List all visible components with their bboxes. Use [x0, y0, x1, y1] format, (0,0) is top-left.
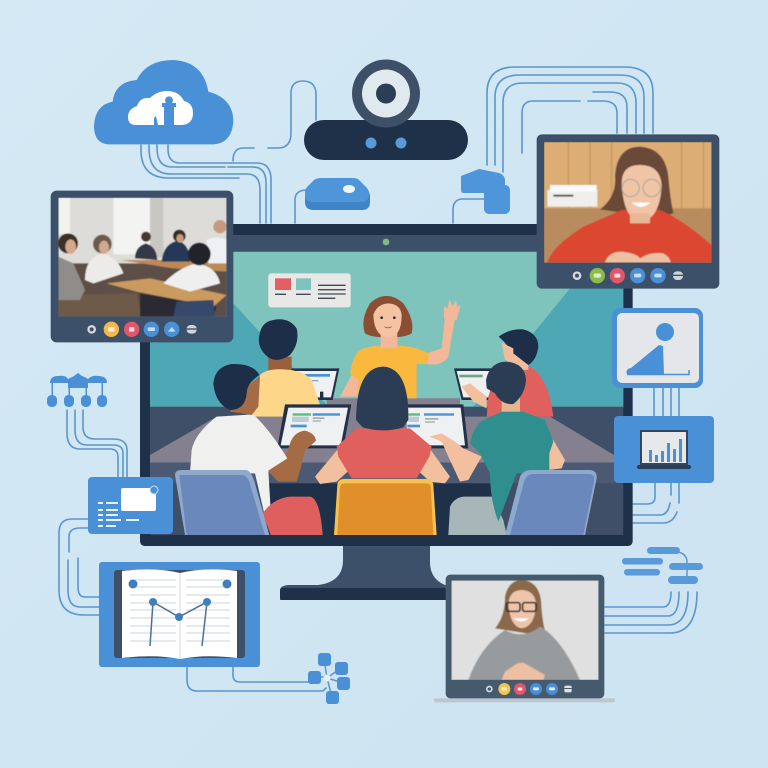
laptop: back right [454, 368, 493, 408]
teacher figure [340, 296, 461, 398]
timeline chart icon [622, 547, 703, 584]
main monitor [140, 224, 633, 600]
laptop: front left [277, 404, 351, 448]
monitor stand [280, 544, 480, 600]
icon: network nodes [308, 653, 350, 704]
laptop: front right [407, 404, 468, 448]
toolbar icons [486, 683, 572, 695]
student: front right [429, 362, 597, 535]
connector lines: top right [453, 67, 653, 223]
whiteboard card [268, 273, 351, 307]
student: front left [175, 364, 323, 535]
group classroom photo [58, 198, 227, 317]
student photo [544, 142, 712, 265]
video window: group classroom [51, 191, 233, 342]
video window: smiling student [537, 134, 719, 289]
icon: org chart [47, 373, 107, 407]
student: back right [487, 329, 553, 417]
toolbar icons [573, 268, 683, 283]
open book panel [99, 562, 260, 667]
toolbar icons [87, 322, 197, 337]
laptop student photo [451, 580, 599, 680]
chair: center [334, 479, 437, 535]
icon: connector block [461, 169, 510, 214]
document card [88, 477, 173, 534]
icon: small hub device [305, 178, 370, 210]
monitor screen scene [140, 224, 633, 546]
student: front center [315, 367, 450, 484]
connector lines: left side [59, 410, 326, 691]
connector lines: right side [605, 388, 697, 633]
laptop: back left [280, 368, 339, 400]
icon: webcam bar [304, 60, 468, 160]
infographic canvas [47, 60, 720, 704]
analytics panel [614, 416, 714, 483]
connector lines: cloud to monitor [141, 81, 316, 223]
student: back left [252, 319, 327, 417]
profile card [612, 308, 703, 388]
icon: cloud [94, 60, 233, 144]
video window: laptop student [434, 575, 615, 702]
